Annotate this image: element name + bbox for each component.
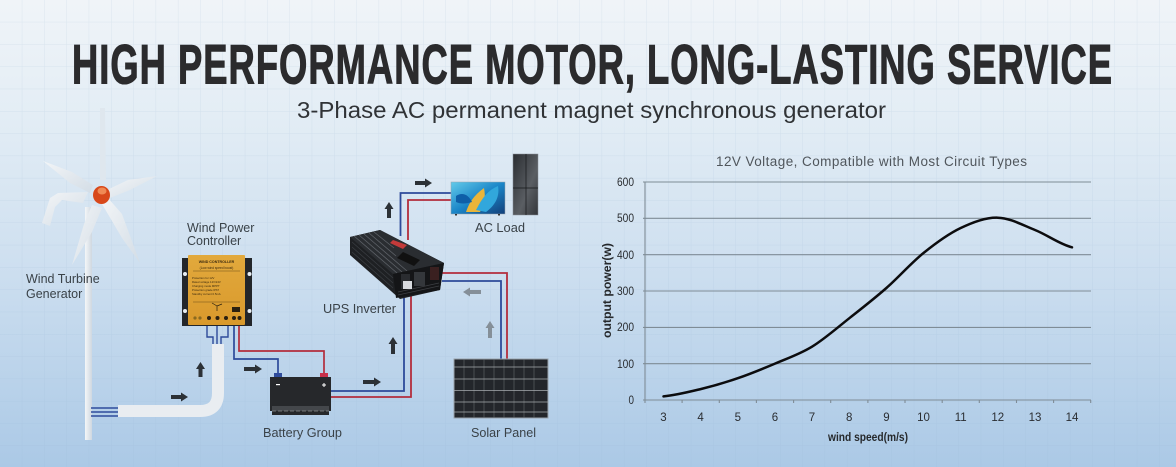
axes: [643, 182, 1091, 403]
y-axis tick labels: 0: [628, 395, 634, 407]
label: solar panel: Solar Panel: [471, 426, 536, 440]
icon: refrigerator: [513, 154, 538, 215]
icon: wind power controller: Standby current 0.5mA: [192, 292, 221, 296]
grid lines: [643, 182, 1091, 364]
icon: wind power controller: (Low wind speed boost): [200, 266, 233, 270]
y-axis tick labels: 600: [617, 177, 634, 189]
icon: wind power controller: WIND CONTROLLER: [199, 260, 235, 264]
x-axis tick labels: [660, 412, 1079, 424]
title: HIGH PERFORMANCE MOTOR, LONG-LASTING SERVICE: [72, 34, 1112, 97]
arrow: grey up from solar panel: [486, 321, 494, 338]
x-axis tick labels: 13: [1029, 412, 1041, 424]
x-axis tick labels: 5: [735, 412, 741, 424]
wires: conduit to controller: [207, 326, 228, 344]
x-axis tick labels: 3: [660, 412, 667, 424]
wires: controller to battery: [234, 326, 324, 373]
arrow: grey left to inverter: [463, 288, 481, 296]
arrow: right from battery: [363, 378, 381, 386]
panel: system wiring diagram: [26, 108, 548, 440]
label: wind power controller: Controller: [187, 234, 241, 248]
arrow: up to controller: [196, 362, 205, 377]
icon: wind power controller: Rated voltage 12V/24V: [192, 280, 221, 284]
y-axis title: output power(w): [602, 243, 614, 338]
icon: wind power controller: Protection grade IP67: [192, 288, 219, 292]
x-axis tick labels: 14: [1066, 412, 1079, 424]
x-axis tick labels: 9: [883, 412, 890, 424]
y-axis tick labels: 200: [617, 322, 634, 334]
y-axis tick labels: 300: [617, 286, 634, 298]
icon: wind power controller: [182, 255, 252, 326]
label: wind turbine generator: Generator: [26, 287, 82, 301]
x-axis tick labels: 8: [846, 412, 852, 424]
icon: wind power controller: Protection for 12V: [192, 276, 215, 280]
subtitle: 3-Phase AC permanent magnet synchronous generator: [297, 97, 886, 123]
arrow: right to battery: [244, 364, 262, 374]
wires: turbine three-phase: [91, 408, 118, 416]
panel: power curve chart: [602, 154, 1091, 444]
label: wind turbine generator: Wind Turbine: [26, 272, 100, 286]
icon: solar panel: [454, 359, 548, 418]
chart title: 12V Voltage, Compatible with Most Circuit Types: [716, 154, 1027, 169]
arrow: up from inverter: [384, 202, 394, 218]
arrow: right to AC load: [415, 178, 432, 188]
x-axis tick labels: 11: [955, 412, 967, 424]
label: wind power controller: Wind Power: [187, 221, 254, 235]
label: UPS inverter: UPS Inverter: [323, 302, 396, 316]
conduit: white cable run: [118, 344, 218, 411]
y-axis tick labels: [617, 177, 634, 407]
icon: UPS inverter: [350, 230, 444, 299]
label: battery group: Battery Group: [263, 426, 342, 440]
icon: wind turbine: [42, 108, 157, 440]
icon: television: [451, 182, 505, 216]
x-axis tick labels: 4: [697, 412, 704, 424]
icon: battery: [270, 373, 331, 415]
y-axis tick labels: 500: [617, 213, 634, 225]
power curve line: [664, 218, 1072, 396]
y-axis tick labels: 100: [617, 359, 634, 371]
x-axis title: wind speed(m/s): [827, 432, 908, 444]
y-axis tick labels: 400: [617, 250, 634, 262]
x-axis tick labels: 12: [991, 412, 1004, 424]
arrow: up to inverter: [388, 337, 398, 354]
wires: battery to inverter: [329, 296, 411, 397]
arrow: right along conduit: [171, 392, 188, 402]
x-axis tick labels: 6: [772, 412, 778, 424]
icon: wind power controller: Charging mode MPPT: [192, 284, 220, 288]
label: AC load: AC Load: [475, 221, 525, 235]
wires: inverter to AC load: [400, 193, 452, 240]
x-axis tick labels: 7: [809, 412, 815, 424]
x-axis tick labels: 10: [917, 412, 930, 424]
wires: solar panel to inverter: [442, 273, 507, 360]
